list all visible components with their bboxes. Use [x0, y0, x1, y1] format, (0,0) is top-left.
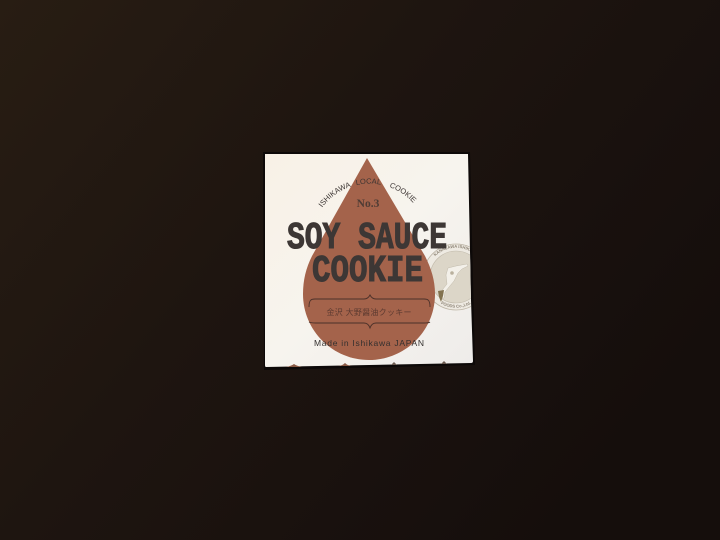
- box shadow: [263, 152, 475, 370]
- series arc label: [318, 178, 416, 207]
- soy sauce drop: [303, 158, 435, 360]
- photo scene: cookie box on dark table: [0, 0, 475, 370]
- series arc label: ISHIKAWA: [318, 182, 351, 207]
- number label: No.3: [357, 198, 380, 210]
- map seal: [427, 244, 471, 310]
- box body: [265, 154, 473, 367]
- ornamental frame top: [309, 295, 430, 307]
- japanese product name: 金沢 大野醤油クッキー: [326, 307, 412, 317]
- ornamental frame bottom: [309, 322, 430, 328]
- seal text: [434, 244, 471, 308]
- map of Ishikawa: [441, 264, 468, 298]
- origin line: Made in Ishikawa JAPAN: [314, 338, 424, 348]
- seal text: KANAZAWA ISHIKAWA: [434, 244, 470, 256]
- cookie box: [265, 154, 473, 367]
- scallop tabs: [286, 361, 447, 367]
- product name line 1: SOY SAUCE: [287, 217, 447, 260]
- series arc label: LOCAL: [356, 178, 381, 185]
- series arc label: COOKIE: [390, 183, 416, 203]
- product name line 2: COOKIE: [312, 250, 423, 293]
- seal text: FOODS Co.,Ltd.: [441, 301, 471, 308]
